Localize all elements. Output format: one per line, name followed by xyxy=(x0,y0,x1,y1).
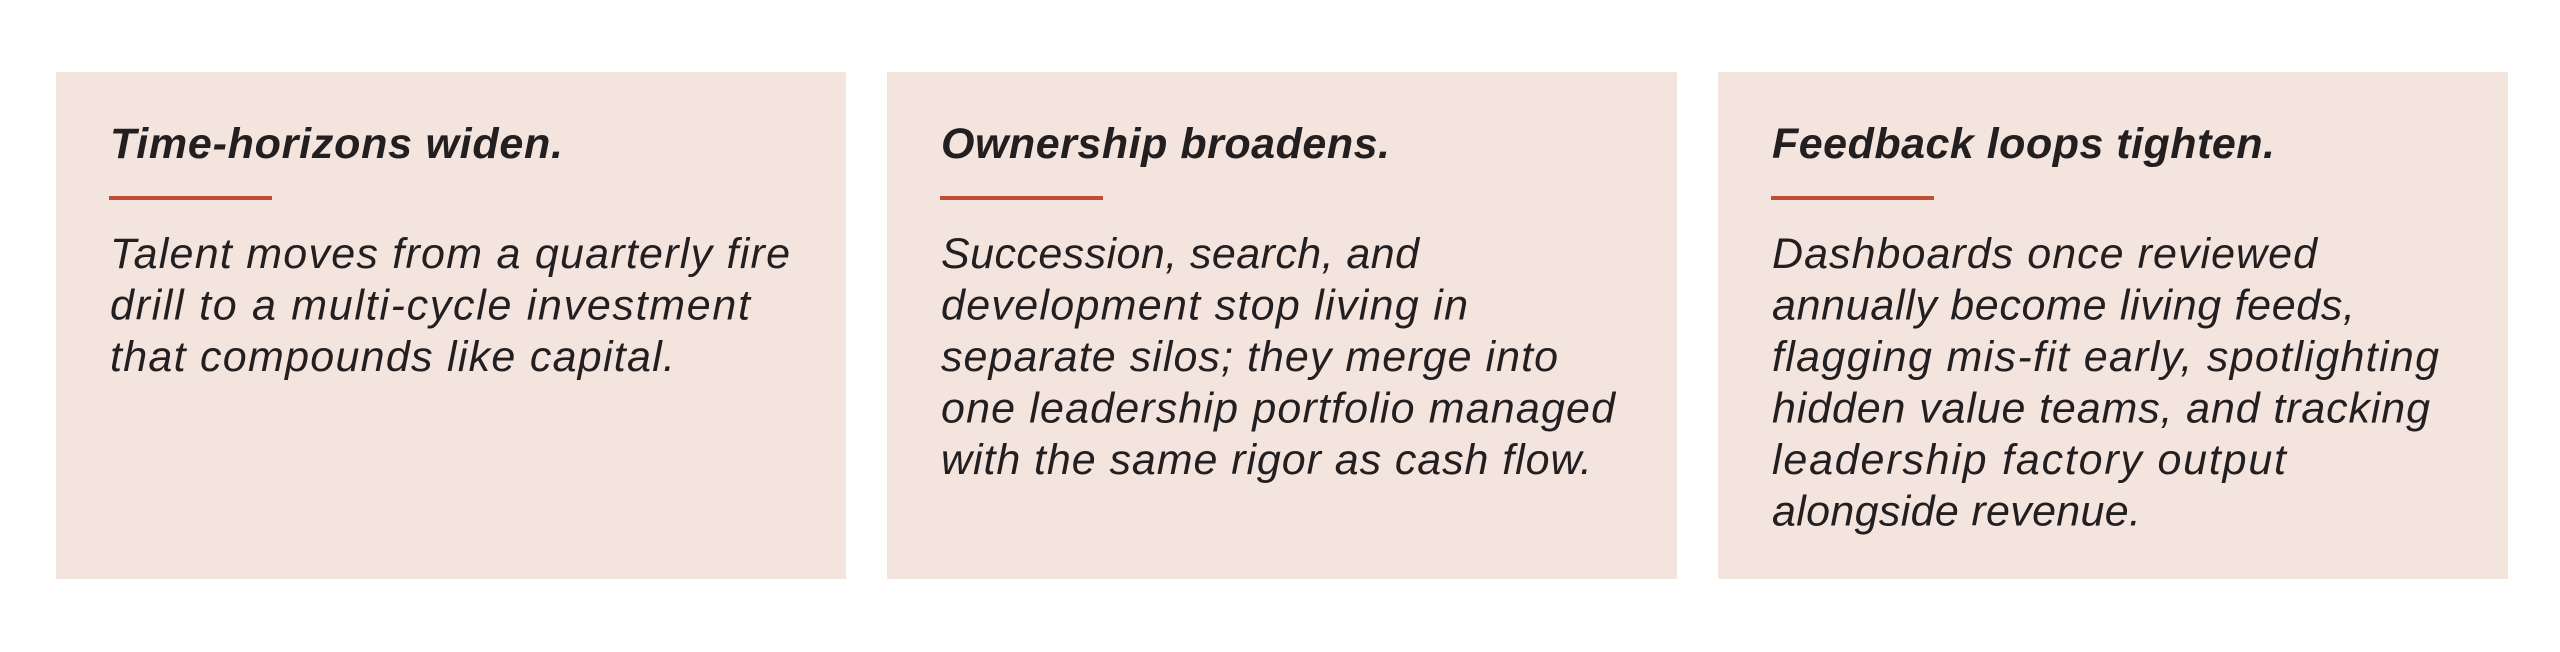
body text: feedback: flagging mis-fit early, spotlighting xyxy=(1772,333,2439,381)
body text: time-horizons: Talent moves from a quarterly fire xyxy=(110,230,790,278)
body text: ownership xyxy=(941,230,1617,484)
body text: feedback: alongside revenue. xyxy=(1772,488,2141,536)
heading: feedback: Feedback loops tighten. xyxy=(1772,120,2275,168)
body text: time-horizons: drill to a multi-cycle investment xyxy=(110,282,752,330)
body text: feedback: Dashboards once reviewed xyxy=(1772,230,2319,278)
panel: ownership broadens xyxy=(887,72,1677,579)
body text: time-horizons: that compounds like capital. xyxy=(110,333,675,381)
body text: feedback: leadership factory output xyxy=(1772,436,2288,484)
heading: time-horizons: Time-horizons widen. xyxy=(110,120,563,168)
body text: feedback: annually become living feeds, xyxy=(1772,282,2355,330)
body text: feedback xyxy=(1772,230,2439,536)
body text: ownership: with the same rigor as cash flow. xyxy=(941,436,1592,484)
panel: feedback loops tighten xyxy=(1718,72,2508,579)
body text: ownership: development stop living in xyxy=(941,282,1468,330)
heading: ownership: Ownership broadens. xyxy=(941,120,1390,168)
panel: time-horizons widen xyxy=(56,72,846,579)
body text: time-horizons xyxy=(110,230,790,381)
body text: ownership: one leadership portfolio managed xyxy=(941,384,1617,432)
accent rule xyxy=(109,196,272,200)
body text: ownership: separate silos; they merge into xyxy=(941,333,1558,381)
accent rule xyxy=(940,196,1103,200)
accent rule xyxy=(1771,196,1934,200)
body text: feedback: hidden value teams, and tracking xyxy=(1772,384,2430,432)
body text: ownership: Succession, search, and xyxy=(941,230,1421,278)
